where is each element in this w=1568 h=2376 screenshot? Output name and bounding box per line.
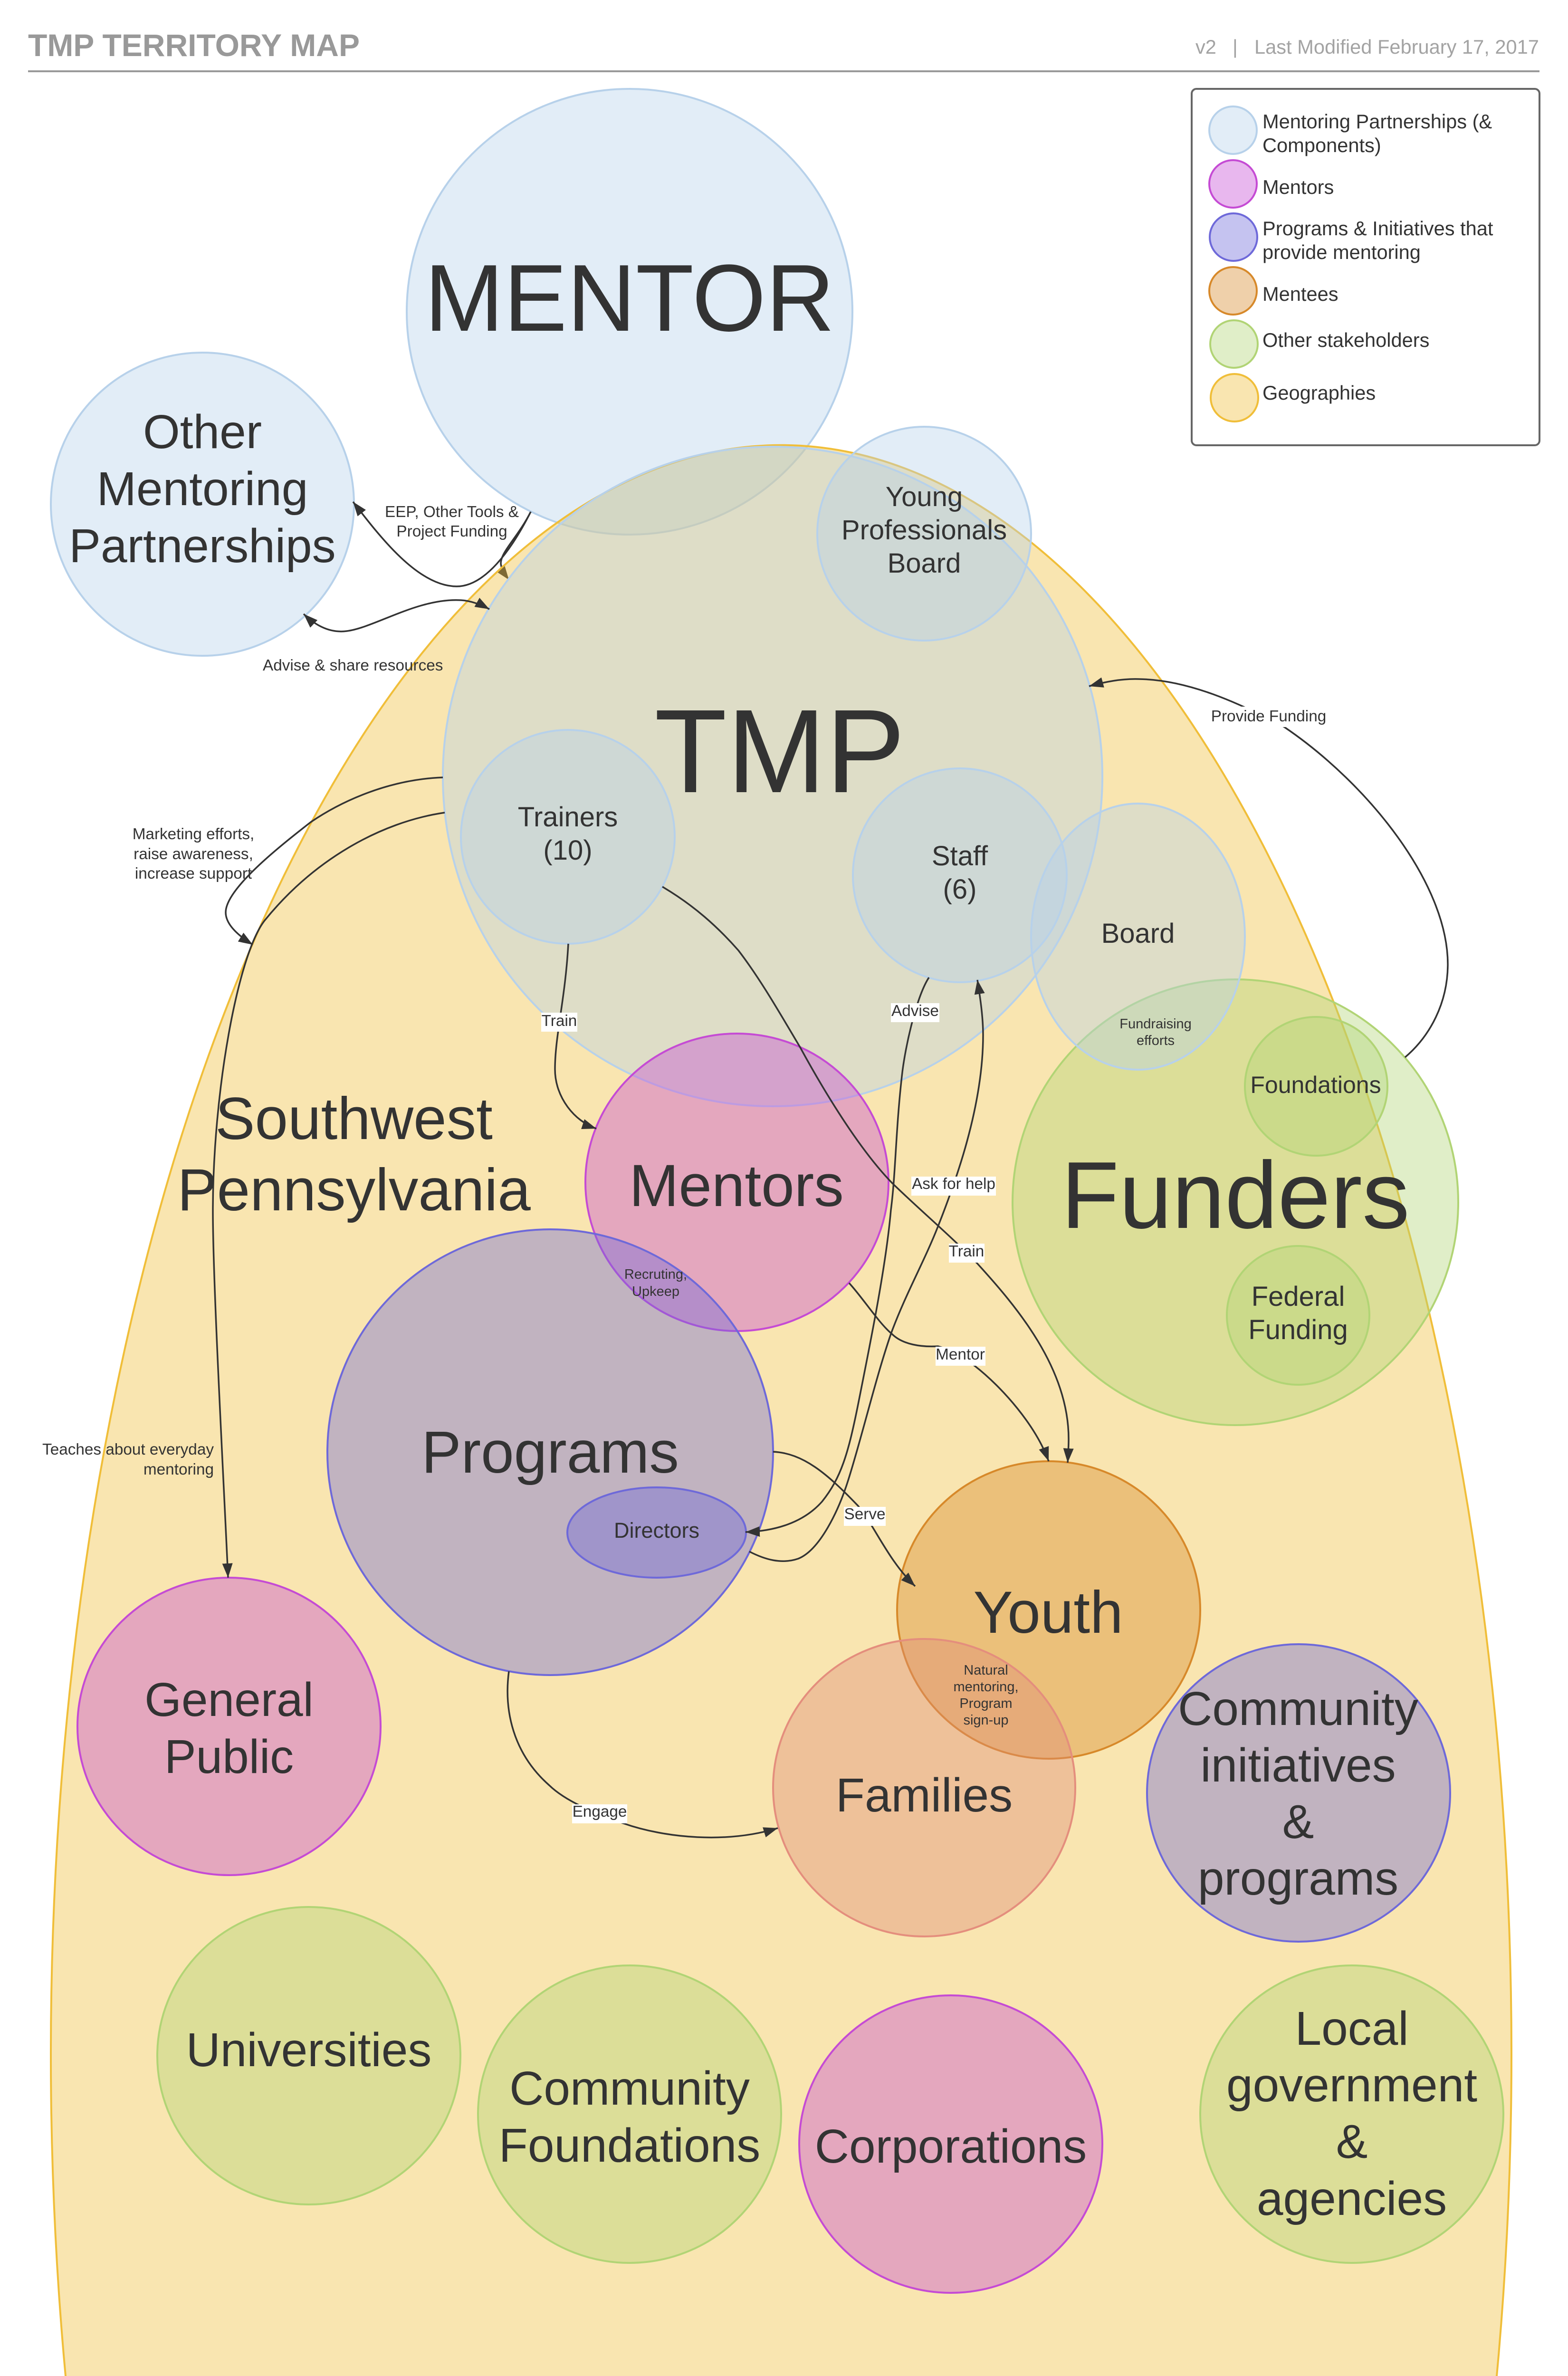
node: Local government & agencies (1200, 1965, 1503, 2263)
node: Community initiatives & programs: & (1282, 1795, 1314, 1849)
node: General Public: General (144, 1673, 314, 1726)
arrow: Trainers to Youth (662, 887, 1069, 1463)
node: Staff (853, 768, 1067, 982)
label: EEP, Other Tools & Project Funding (385, 503, 519, 540)
legend item: mentees: Mentees (1262, 283, 1339, 305)
node: Federal Funding: Funding (1248, 1314, 1348, 1345)
node: Board (1031, 804, 1245, 1070)
node: Mentors: Mentors (629, 1153, 844, 1219)
node: Families (773, 1639, 1075, 1936)
node: Funders (1013, 979, 1458, 1425)
node: Young Professionals Board: Professionals (841, 515, 1007, 546)
node: Other Mentoring Partnerships: Mentoring (97, 462, 308, 516)
label: Serve: Serve (844, 1505, 885, 1523)
node: Community Foundations (478, 1965, 781, 2263)
label: Marketing efforts (133, 825, 254, 882)
node: Universities: Universities (186, 2023, 431, 2077)
label: Teaches about everyday mentoring: Teaches about everyday (42, 1441, 214, 1458)
label: Natural mentoring, Program sign-up: Program (959, 1696, 1013, 1711)
node: Local government & agencies: agencies (1257, 2172, 1447, 2225)
arrow: TMP marketing to Southwest Pennsylvania (226, 777, 443, 945)
node: Local government & agencies: & (1336, 2115, 1367, 2168)
label: Teaches about everyday mentoring (42, 1441, 214, 1478)
node: Community initiatives & programs (1147, 1644, 1450, 1942)
node: Board: Board (1101, 918, 1175, 949)
label: Recruting, Upkeep: Upkeep (632, 1284, 679, 1299)
node: Youth: Youth (973, 1580, 1123, 1646)
arrow: TMP to General Public (213, 813, 445, 1578)
node: Staff: Staff (932, 841, 988, 872)
node: Funders: Funders (1061, 1142, 1410, 1248)
node: Federal Funding: Federal (1252, 1281, 1345, 1312)
legend item: other stakeholders (1210, 320, 1429, 368)
arrow: MENTOR to TMP (behind geography) (501, 512, 531, 580)
label: Teaches about everyday mentoring: mentoring (143, 1461, 214, 1478)
node: Directors (567, 1487, 746, 1578)
arrow: advise and share resources (two-way) (304, 600, 489, 632)
arrow: Programs engage Families (507, 1671, 778, 1838)
label: Marketing efforts: increase support (135, 865, 252, 882)
arrow: Directors ask Staff for help (749, 980, 983, 1561)
arrow: Programs serve Youth (773, 1452, 915, 1586)
legend item: mentoring partnerships: Mentoring Partnerships (& (1262, 110, 1492, 133)
node: Families: Families (836, 1769, 1013, 1822)
label: Fundraising efforts: efforts (1137, 1033, 1175, 1048)
node: Corporations: Corporations (815, 2120, 1087, 2173)
geography: Southwest Pennsylvania (51, 445, 1511, 2376)
node: Trainers: Trainers (518, 802, 618, 833)
node: Other Mentoring Partnerships: Other (143, 405, 262, 459)
node: Community Foundations: Foundations (499, 2119, 760, 2172)
label: Natural mentoring, Program sign-up: mentoring, (953, 1679, 1019, 1695)
legend item: geographies: Geographies (1262, 382, 1376, 404)
legend item: programs and initiatives (1210, 213, 1493, 263)
node: Directors: Directors (614, 1518, 699, 1542)
label: Fundraising efforts (1119, 1016, 1192, 1048)
node: Community initiatives & programs: Community (1178, 1682, 1418, 1735)
header (28, 28, 1539, 72)
label: Natural mentoring, Program sign-up: Natural (964, 1663, 1008, 1678)
arrow: Staff advises Directors (746, 977, 929, 1532)
label: Recruting, Upkeep: Recruting, (624, 1267, 687, 1282)
node: Universities (157, 1907, 460, 2204)
label: Natural mentoring, Program sign-up (953, 1663, 1019, 1728)
node: Community initiatives & programs: initiatives (1200, 1739, 1396, 1792)
label: Advise: Advise (891, 1002, 939, 1020)
node: TMP: TMP (654, 685, 905, 817)
node: Corporations (799, 1995, 1102, 2293)
arrow: Trainers to Mentors (555, 944, 596, 1129)
node: Young Professionals Board: Board (888, 548, 961, 579)
node: General Public (77, 1578, 381, 1875)
label: Marketing efforts: raise awareness, (134, 845, 253, 863)
label: Engage: Engage (573, 1803, 627, 1820)
node: Federal Funding (1227, 1246, 1369, 1385)
geography: Southwest Pennsylvania: Southwest (215, 1086, 493, 1152)
node: Trainers (461, 730, 675, 944)
label: Train (Youth): Train (949, 1243, 984, 1260)
arrow: MENTOR to Other Mentoring Partnerships (353, 502, 531, 586)
label: Provide Funding: Provide Funding (1211, 708, 1326, 725)
label: Advise & share resources: Advise & share resources (263, 657, 443, 674)
node: Programs (327, 1229, 773, 1675)
label: Fundraising efforts: Fundraising (1119, 1016, 1192, 1032)
node: Other Mentoring Partnerships: Partnerships (69, 519, 336, 573)
node: Staff: (6) (943, 874, 976, 905)
arrow: Funders provide funding to TMP (1089, 679, 1448, 1057)
label: Marketing efforts: Marketing efforts, (133, 825, 254, 843)
legend item: programs and initiatives: Programs & Initiatives that (1262, 217, 1493, 240)
version and last modified date: | (1233, 36, 1238, 58)
node: Young Professionals Board (817, 427, 1031, 641)
legend item: mentors (1209, 160, 1334, 208)
label: Ask for help: Ask for help (912, 1175, 995, 1193)
node: Foundations (1245, 1017, 1387, 1156)
version and last modified date: v2 (1195, 36, 1216, 58)
legend item: geographies (1211, 374, 1376, 422)
node: Young Professionals Board: Young (886, 481, 963, 512)
node: Other Mentoring Partnerships (51, 353, 354, 656)
label: Recruting, Upkeep (624, 1267, 687, 1299)
legend item: programs and initiatives: provide mentoring (1262, 241, 1421, 263)
legend item: mentees (1209, 267, 1339, 315)
arrow: Mentors to Youth (849, 1283, 1049, 1461)
node: Local government & agencies: government (1226, 2059, 1477, 2112)
node: TMP (443, 447, 1102, 1106)
legend item: mentoring partnerships: Components) (1262, 134, 1381, 156)
node: Local government & agencies: Local (1295, 2002, 1409, 2055)
label: Train (Mentors): Train (542, 1012, 577, 1030)
label: EEP, Other Tools & Project Funding: EEP, Other Tools & (385, 503, 519, 521)
node: General Public: Public (164, 1730, 294, 1783)
legend item: mentors: Mentors (1262, 176, 1334, 198)
geography: Southwest Pennsylvania: Pennsylvania (177, 1157, 531, 1223)
node: Community Foundations: Community (509, 2062, 750, 2115)
label: Natural mentoring, Program sign-up: sign-up (963, 1713, 1009, 1728)
node: Youth (897, 1461, 1200, 1759)
node: Mentors (585, 1034, 889, 1331)
label: EEP, Other Tools & Project Funding: Project Funding (396, 523, 507, 540)
node: Community initiatives & programs: programs (1198, 1852, 1398, 1905)
legend item: other stakeholders: Other stakeholders (1262, 329, 1429, 351)
title: TMP TERRITORY MAP (28, 28, 360, 63)
legend (1192, 89, 1539, 445)
node: Programs: Programs (421, 1419, 679, 1485)
version and last modified date: Last Modified February 17, 2017 (1254, 36, 1539, 58)
node: Foundations: Foundations (1250, 1072, 1381, 1098)
legend item: mentoring partnerships (1209, 106, 1492, 156)
node: MENTOR (407, 89, 852, 535)
node: Trainers: (10) (543, 835, 593, 866)
node: MENTOR: MENTOR (425, 245, 834, 351)
label: Mentor: Mentor (936, 1346, 985, 1363)
